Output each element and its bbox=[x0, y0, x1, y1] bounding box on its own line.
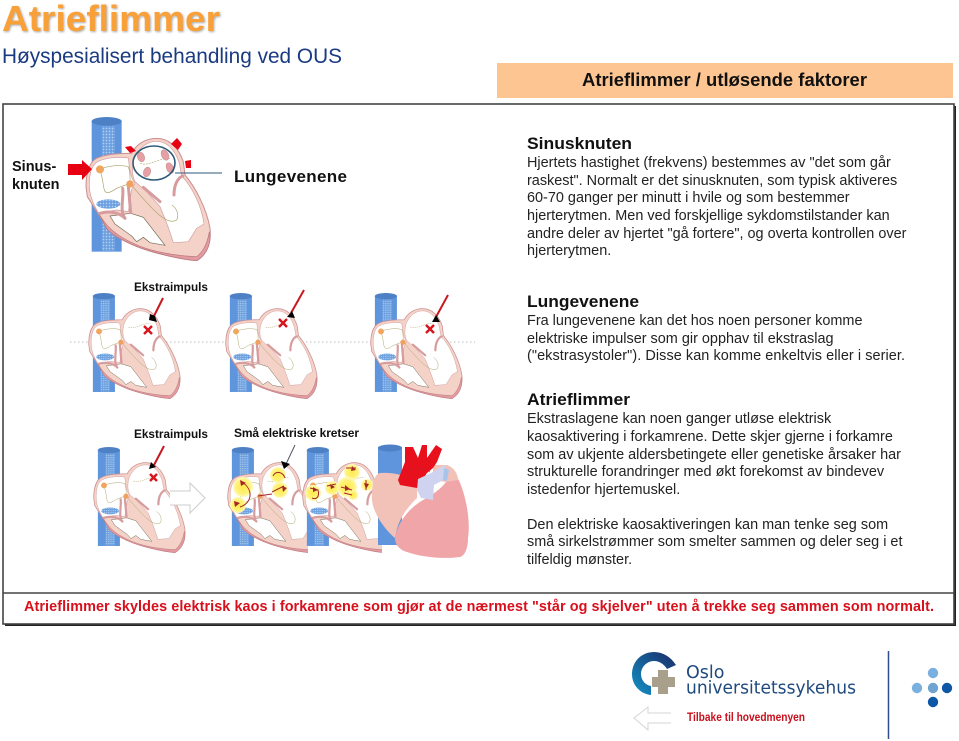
logo: Oslo universitetssykehus bbox=[632, 652, 856, 698]
icon: logo ring bbox=[632, 652, 676, 695]
text block: Lungevenene: ("ekstrasystoler"). Disse kan komme enkeltvis eller i serier. bbox=[527, 348, 905, 364]
label: sinus node: Sinus- bbox=[12, 159, 56, 175]
panel: extra impulse row bbox=[70, 280, 475, 399]
subtitle: Høyspesialisert behandling ved OUS bbox=[2, 45, 342, 68]
text block: Atrieflimmer: Atrieflimmer bbox=[527, 391, 631, 409]
text block: Sinusknuten: 60-70 ganger per minutt i hvile og som bestemmer bbox=[527, 190, 850, 206]
text block: Atrieflimmer: strukturelle forandringer med økt forekomst av bindevev bbox=[527, 464, 885, 480]
text block: Atrieflimmer bbox=[527, 391, 901, 498]
text block: Lungevenene bbox=[527, 293, 905, 364]
text block: Sinusknuten: Sinusknuten bbox=[527, 135, 632, 153]
pulmonary vein ring and leader bbox=[133, 146, 222, 180]
icon: dots bbox=[912, 668, 952, 707]
label: extra impulse: Ekstraimpuls bbox=[134, 280, 208, 294]
icon: red pulmonary vein stubs bbox=[125, 138, 191, 168]
back arrow bbox=[634, 707, 671, 730]
panel: sinus node and pulmonary veins heart diagram bbox=[12, 117, 347, 261]
logo text: Oslo bbox=[686, 663, 724, 683]
label: small electrical circuits: Små elektriske kretser bbox=[234, 426, 359, 440]
heart exterior bbox=[372, 444, 469, 558]
heart 2 bbox=[226, 290, 317, 399]
divider bbox=[888, 651, 890, 739]
main frame bbox=[3, 104, 956, 626]
text block: electrical chaos bbox=[527, 517, 902, 568]
link: back to main menu: Tilbake til hovedmenyen bbox=[687, 712, 805, 724]
text block: electrical chaos: små sirkelstrømmer som smelter sammen og deler seg i et bbox=[527, 534, 902, 550]
logo text: universitetssykehus bbox=[686, 678, 856, 698]
text block: Atrieflimmer: istedenfor hjertemuskel. bbox=[527, 482, 680, 498]
text block: Lungevenene: Fra lungevenene kan det hos noen personer komme bbox=[527, 313, 862, 329]
heart with extra impulse bbox=[94, 446, 185, 553]
callout: conclusion: Atrieflimmer skyldes elektrisk kaos i forkamrene som gjør at de nærmest "står og skjelver" uten å trekke seg sammen som normalt. bbox=[24, 599, 934, 615]
label: extra impulse: Ekstraimpuls bbox=[134, 427, 208, 441]
text block: Sinusknuten: Hjertets hastighet (frekvens) bestemmes av "det som går bbox=[527, 155, 891, 171]
text block: electrical chaos: Den elektriske kaosaktiveringen kan man tenke seg som bbox=[527, 517, 888, 533]
icon: logo cross bbox=[652, 670, 675, 694]
text block: Sinusknuten: andre deler av hjertet "gå fortere", og overta kontrollen over bbox=[527, 226, 907, 242]
text block: Lungevenene: elektriske impulser som gir opphav til ekstraslag bbox=[527, 331, 834, 347]
text block: Lungevenene: Lungevenene bbox=[527, 293, 639, 311]
header bar bbox=[497, 63, 953, 98]
text block: Sinusknuten bbox=[527, 135, 907, 259]
arrow: transition bbox=[170, 483, 205, 513]
text block: Sinusknuten: hjerterytmen. Men ved forskjellige sykdomstilstander kan bbox=[527, 208, 890, 224]
label: sinus node: knuten bbox=[12, 177, 60, 193]
heart with many circuits bbox=[302, 447, 382, 553]
heart 3 bbox=[371, 293, 462, 399]
text block: Atrieflimmer: kaosaktivering i forkamrene. Dette skjer gjerne i forkamre bbox=[527, 429, 893, 445]
text block: Sinusknuten: raskest". Normalt er det sinusknuten, som typisk aktiveres bbox=[527, 173, 897, 189]
label: pulmonary veins: Lungevenene bbox=[234, 167, 347, 186]
text block: Sinusknuten: hjerterytmen. bbox=[527, 243, 611, 259]
icon: red arrow to sinus node bbox=[68, 160, 92, 180]
text block: Atrieflimmer: som av ukjente aldersbetingete eller genetiske årsaker har bbox=[527, 447, 901, 463]
text block: Atrieflimmer: Ekstraslagene kan noen ganger utløse elektrisk bbox=[527, 411, 832, 427]
panel: atrial fibrillation row bbox=[94, 426, 469, 558]
icon: pink pulmonary vein spots bbox=[136, 149, 175, 178]
header bar: Atrieflimmer / utløsende faktorer bbox=[582, 69, 867, 90]
text block: electrical chaos: tilfeldig mønster. bbox=[527, 552, 632, 568]
heart with two circuits bbox=[227, 447, 308, 553]
heart 1 bbox=[89, 293, 180, 399]
arrow: circuit pointer bbox=[281, 445, 295, 469]
